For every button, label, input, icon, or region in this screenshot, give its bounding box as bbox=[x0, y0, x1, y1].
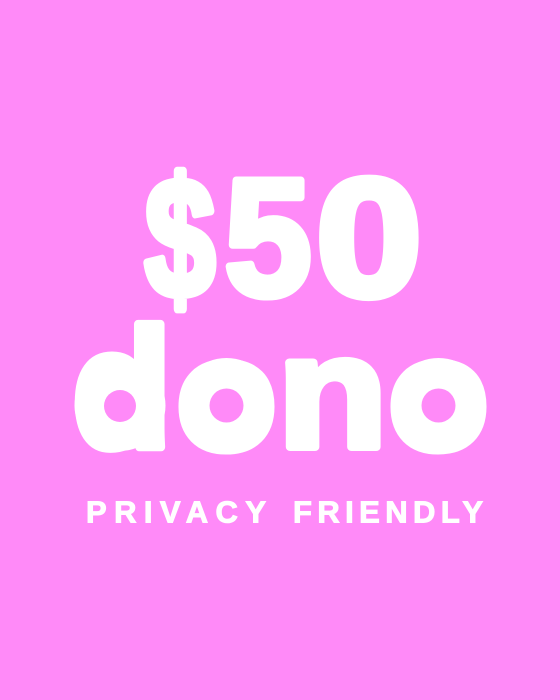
headline: dono: d bbox=[72, 294, 172, 484]
headline: $50: $ bbox=[145, 144, 215, 333]
headline: dono: n bbox=[278, 302, 387, 481]
headline: $50: 5 bbox=[225, 145, 311, 331]
headline: dono bbox=[72, 294, 489, 484]
headline: $50: 0 bbox=[316, 144, 422, 331]
headline: $50 bbox=[145, 144, 422, 333]
headline: dono: o bbox=[176, 305, 277, 483]
headline: dono: o bbox=[388, 305, 489, 483]
tagline: PRIVACY bbox=[86, 494, 266, 530]
tagline: FRIENDLY bbox=[293, 494, 483, 530]
tagline bbox=[86, 494, 483, 530]
